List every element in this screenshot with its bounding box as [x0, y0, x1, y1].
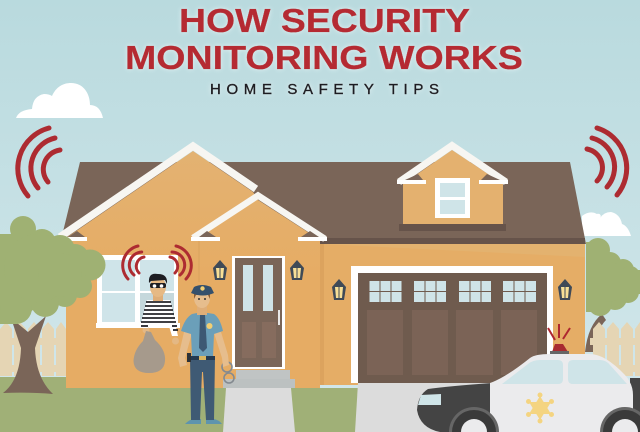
badge [206, 323, 212, 329]
lamp 1 [213, 260, 227, 280]
thief head [149, 274, 167, 301]
tie [199, 315, 207, 352]
right tree trunk [585, 314, 606, 352]
title: HOW SECURITY [179, 2, 470, 39]
striped shirt [140, 300, 178, 336]
dormer [397, 146, 508, 231]
cloud: right [582, 212, 631, 236]
roof eave shadow [320, 238, 585, 244]
subtitle: HOME SAFETY TIPS [210, 81, 439, 98]
house walls [66, 151, 585, 388]
lamp 3 [332, 279, 346, 300]
lamps [213, 260, 572, 300]
lamp 2 [290, 260, 304, 280]
dormer window [435, 178, 470, 218]
loot bag [134, 331, 165, 373]
front window [96, 255, 180, 328]
car rear [630, 378, 640, 432]
front steps [223, 370, 295, 388]
icon: thief right alarm signal [170, 246, 191, 279]
car windows [502, 360, 627, 384]
canopy [0, 216, 106, 324]
fence: left [0, 322, 66, 376]
siren [550, 344, 569, 354]
neck and head [194, 288, 210, 315]
main gable trim [60, 146, 256, 237]
belt [187, 353, 215, 362]
garage windows [370, 281, 536, 302]
police cap [191, 285, 214, 296]
fence: right [590, 322, 640, 376]
title: MONITORING WORKS [125, 39, 523, 76]
icon: left alarm signal [18, 128, 60, 196]
rear wheel [600, 407, 640, 432]
front door [232, 256, 285, 369]
left tree [0, 216, 106, 394]
shirt [181, 313, 223, 357]
boots [185, 419, 222, 424]
police officer [178, 285, 234, 424]
walkway [223, 388, 295, 432]
car body [490, 354, 633, 432]
police car [417, 324, 640, 432]
title [125, 2, 523, 76]
driveway [355, 383, 515, 432]
grass [0, 377, 640, 432]
lamp 4 [558, 279, 572, 300]
arms [178, 332, 229, 367]
icon: right alarm signal [587, 128, 627, 195]
eave returns [58, 231, 327, 241]
icon: thief left alarm signal [123, 246, 144, 279]
thief [140, 274, 179, 344]
front wheel [449, 407, 499, 432]
sheriff star [526, 392, 554, 424]
front gable trim [193, 196, 325, 239]
handcuffs [222, 362, 234, 383]
garage panels [367, 310, 537, 375]
wall highlight [320, 244, 585, 257]
cloud: left [16, 83, 103, 118]
headlight [418, 394, 441, 405]
thief hands [142, 326, 179, 344]
garage [351, 266, 553, 383]
house roof [60, 162, 586, 244]
right tree canopy [586, 238, 640, 316]
car hood [417, 383, 495, 432]
trunk [3, 316, 53, 394]
siren light rays [548, 324, 570, 340]
trousers [190, 357, 215, 420]
